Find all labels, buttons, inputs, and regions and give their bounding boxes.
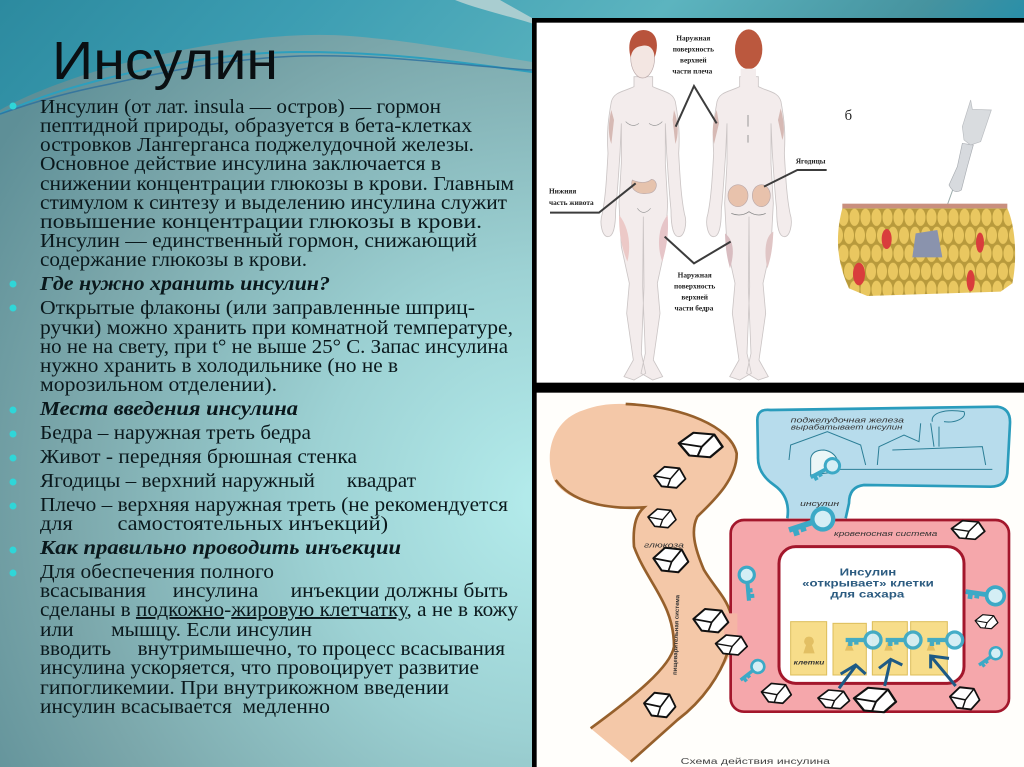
list: injection sites [40, 423, 508, 535]
paragraph: how to inject: инсулин всасывается медленно [40, 697, 330, 718]
injection depot [912, 230, 942, 257]
label: lower abdomen: Нижняя [549, 186, 576, 195]
paragraph: definition: Основное действие инсулина заключается в [40, 154, 441, 175]
paragraph: storage: нужно хранить в холодильнике (но не в [40, 356, 398, 377]
inner heading: Инсулин [840, 567, 896, 578]
list: injection sites: Живот - передняя брюшная стенка [40, 447, 357, 468]
sugar cubes [644, 433, 998, 717]
label: upper arm: части плеча [672, 66, 713, 75]
paragraph: definition: снижении концентрации глюкозы в крови. Главным [40, 174, 514, 195]
inner heading: «открывает» клетки [802, 579, 934, 590]
paragraph: how to inject: инсулина ускоряется, что провоцирует развитие [40, 658, 479, 679]
label: cells: клетки [794, 660, 825, 667]
label: upper arm [672, 34, 714, 75]
list: injection sites: Ягодицы – верхний наружный квадрат [40, 471, 417, 492]
label: insulin: инсулин [800, 499, 840, 508]
bullet markers [10, 102, 16, 576]
paragraph: storage [40, 298, 513, 396]
heading: injection sites: Места введения инсулина [39, 399, 298, 420]
paragraph: definition: пептидной природы, образуется в бета-клетках [40, 116, 472, 137]
digestive tract [550, 404, 737, 762]
inner cell area [779, 547, 964, 683]
list: injection sites: Бедра – наружная треть бедра [40, 423, 311, 444]
paragraph: how to inject: или мышцу. Если инсулин [40, 620, 312, 641]
paragraph: definition: Инсулин (от лат. insula — остров) — гормон [40, 97, 441, 118]
scheme caption: Схема действия инсулина [681, 757, 831, 766]
paragraph: storage: ручки) можно хранить при комнатной температуре, [40, 318, 513, 339]
pancreas caption [791, 415, 904, 431]
label: glucose: глюкоза [644, 540, 684, 549]
label: upper arm: Наружная [676, 34, 710, 43]
paragraph: how to inject: сделаны в подкожно -жировую клетчатку , а не в кожу [40, 600, 518, 621]
cells [791, 622, 947, 675]
label: thigh: поверхность [674, 281, 715, 290]
paragraph: definition: островков Лангерганса поджелудочной железы. [40, 135, 474, 156]
label: blood system: кровеносная система [834, 529, 937, 538]
pointer lines [550, 86, 827, 263]
label: upper arm: верхней [680, 55, 707, 64]
pancreas box [757, 407, 1010, 518]
title: Инсулин [52, 31, 278, 91]
label: thigh [674, 270, 715, 313]
keyholes [803, 637, 935, 653]
label: buttocks: Ягодицы [796, 156, 826, 165]
label: lower abdomen [549, 186, 594, 207]
panel: injection sites on the body [537, 23, 1024, 383]
paragraph: storage: Открытые флаконы (или заправленные шприц- [40, 298, 475, 319]
paragraph: definition: повышение концентрации глюкозы в крови. [40, 212, 482, 233]
icon: syringe [947, 100, 991, 205]
keys [737, 506, 1005, 685]
back figure [707, 29, 791, 380]
inner heading: для сахара [830, 589, 905, 600]
label: digestive system: пищеварительная система [673, 594, 681, 675]
label: upper arm: поверхность [673, 45, 714, 54]
paragraph: storage: морозильном отделении). [40, 375, 277, 396]
pancreas caption: поджелудочная железа [791, 415, 904, 424]
paragraph: how to inject: гипогликемии. При внутрикожном введении [40, 678, 449, 699]
skin tissue diagram [838, 204, 1015, 296]
paragraph: how to inject: вводить внутримышечно, то процесс всасывания [40, 639, 505, 660]
pancreas caption: вырабатывает инсулин [791, 422, 903, 431]
inner heading [802, 567, 934, 600]
paragraph: definition: стимулом к синтезу и выделению инсулина служит [40, 193, 508, 214]
heading: how to inject: Как правильно проводить инъекции [39, 538, 401, 559]
paragraph: how to inject: Для обеспечения полного [40, 562, 274, 583]
label: lower abdomen: часть живота [549, 198, 594, 207]
paragraph: definition [40, 97, 514, 271]
list: injection sites: Плечо – верхняя наружная треть (не рекомендуется [40, 495, 508, 516]
label: thigh: верхней [681, 292, 709, 301]
panel frames [532, 18, 1024, 767]
heading: storage: Где нужно хранить инсулин? [39, 274, 330, 295]
paragraph: definition: содержание глюкозы в крови. [40, 250, 307, 271]
factory drawing [789, 411, 992, 469]
blood system box [724, 520, 1009, 712]
label: thigh: части бедра [675, 304, 714, 313]
paragraph: definition: Инсулин — единственный гормон, снижающий [40, 231, 477, 252]
arrows [839, 656, 956, 688]
label: б: б [845, 108, 852, 124]
header swirl [0, 0, 1024, 114]
label: thigh: Наружная [678, 270, 712, 279]
list: injection sites: для самостоятельных инъекций) [40, 514, 388, 535]
paragraph: storage: но не на свету, при t° не выше 25° С. Запас инсулина [40, 337, 508, 358]
paragraph: how to inject: всасывания инсулина инъекции должны быть [40, 581, 508, 602]
left text column [10, 97, 518, 718]
blood vessels [853, 229, 984, 291]
paragraph: how to inject [40, 562, 518, 718]
front figure [601, 30, 686, 380]
panel: insulin action scheme [537, 393, 1024, 767]
